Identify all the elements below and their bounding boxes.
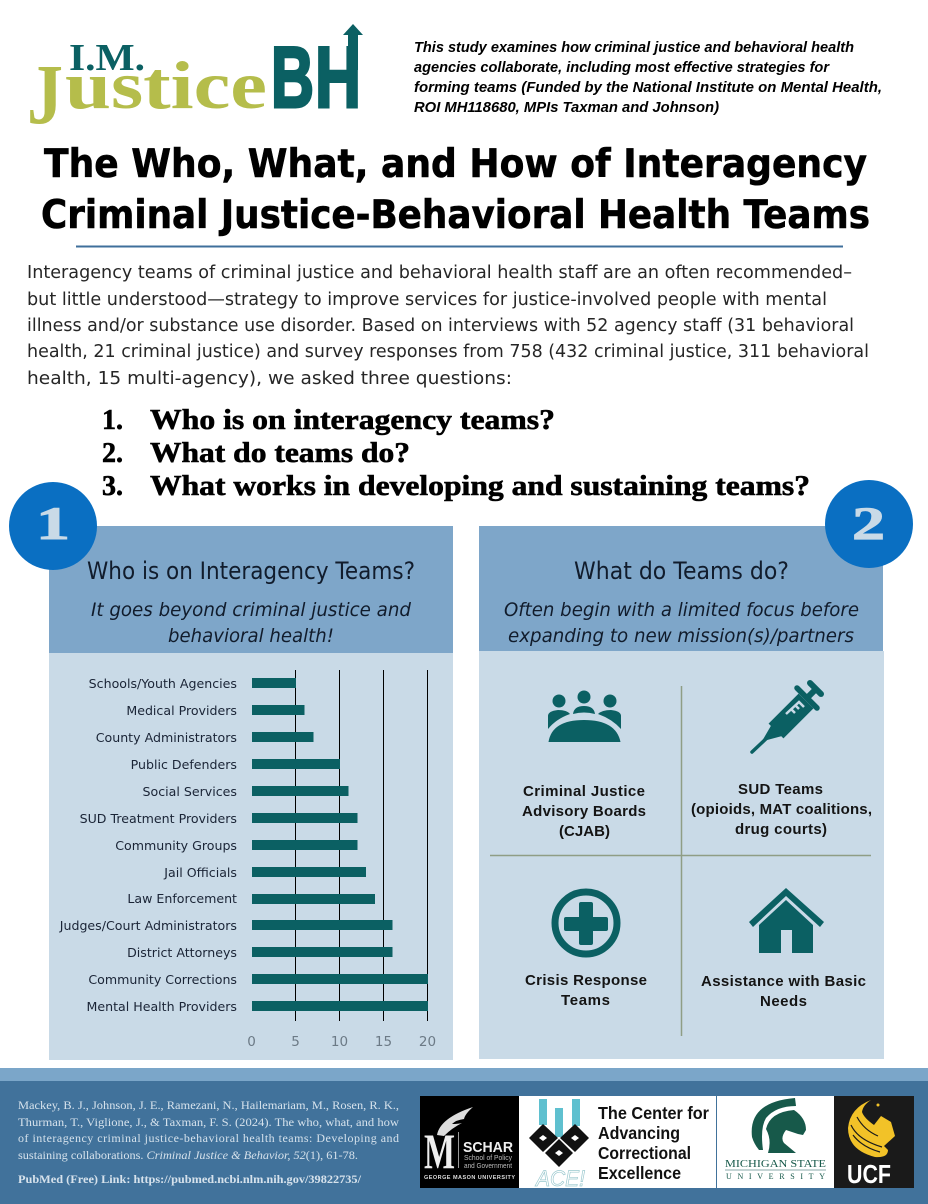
panel 1 subheading: It goes beyond criminal justice and (91, 599, 412, 621)
icon: people around table (548, 690, 621, 742)
badge 1: 1 (36, 498, 70, 550)
logo: I.M. JusticeBH: J (27, 46, 63, 142)
citation (18, 1098, 399, 1186)
bar chart: 0 (247, 1034, 256, 1050)
label: basic needs: Needs (760, 993, 807, 1010)
logo: I.M. JusticeBH: B (271, 30, 314, 126)
bar chart: Community Groups (115, 838, 237, 853)
logo: UCF (834, 1096, 914, 1189)
bar chart: 5 (291, 1034, 300, 1050)
bar chart: Judges/Court Administrators (59, 918, 237, 933)
logo: Schar School: GEORGE MASON UNIVERSITY (424, 1175, 515, 1181)
label: CJAB: (CJAB) (559, 823, 610, 840)
label: CJAB: Advisory Boards (522, 803, 646, 820)
logo: ACE: Advancing (598, 1123, 680, 1143)
bar chart: 10 (331, 1034, 348, 1050)
intro paragraph: illness and/or substance use disorder. Based on interviews with 52 agency staff (31 behavioral (27, 315, 854, 336)
badge 2: 2 (852, 498, 885, 550)
label: CJAB: Criminal Justice (523, 783, 645, 800)
study description (414, 40, 882, 116)
panel 2 heading: What do Teams do? (574, 557, 789, 585)
logo: I.M. JusticeBH: H (315, 30, 361, 126)
three questions (102, 405, 810, 502)
three questions: What do teams do? (150, 438, 410, 469)
label: SUD teams (691, 781, 872, 838)
bar chart: SUD Treatment Providers (80, 811, 237, 826)
bar chart: 20 (419, 1034, 436, 1050)
three questions: 3. (102, 471, 123, 502)
logo: I.M. JusticeBH: ustice (65, 47, 267, 123)
logo: Michigan State (716, 1096, 834, 1188)
panel 1: who is on teams (49, 526, 453, 1060)
icon: medical cross (555, 892, 617, 954)
bar chart: Medical Providers (126, 703, 237, 718)
logo: UCF: UCF (847, 1159, 891, 1189)
title: The Who, What, and How of Interagency (44, 142, 867, 187)
logo: ACE: ACE! (534, 1166, 585, 1191)
citation: Mackey, B. J., Johnson, J. E., Ramezani, N., Hailemariam, M., Rosen, R. K., (18, 1098, 399, 1112)
label: basic needs: Assistance with Basic (701, 973, 866, 990)
label: SUD teams: (opioids, MAT coalitions, (691, 801, 872, 818)
logo: Schar School: SCHAR (463, 1139, 513, 1156)
logo: Schar School: M (424, 1123, 455, 1179)
panel 1 subheading (91, 599, 412, 647)
bar chart: 15 (375, 1034, 392, 1050)
citation: of interagency criminal justice-behavioral health teams: Developing and (18, 1131, 399, 1145)
icon: house (749, 888, 824, 953)
panel 2 subheading: expanding to new mission(s)/partners (508, 625, 854, 647)
logo: ACE (519, 1096, 716, 1191)
bar chart: Schools/Youth Agencies (89, 676, 237, 691)
logo: ACE: Excellence (598, 1163, 681, 1183)
bar chart: Mental Health Providers (86, 999, 237, 1014)
label: SUD teams: drug courts) (735, 821, 827, 838)
label: crisis response: Crisis Response (525, 972, 647, 989)
bar chart: County Administrators (96, 730, 237, 745)
logo: Schar School: and Government (464, 1163, 512, 1170)
logo: I.M. JusticeBH (27, 24, 363, 142)
label: crisis response: Teams (561, 992, 610, 1009)
three questions: 1. (102, 405, 123, 436)
label: basic needs (701, 973, 866, 1010)
intro paragraph: health, 15 multi-agency), we asked three questions: (27, 368, 512, 389)
study description: forming teams (Funded by the National Institute on Mental Health, (414, 80, 882, 96)
label: CJAB (522, 783, 646, 840)
intro paragraph: Interagency teams of criminal justice and behavioral health staff are an often recommended– (27, 262, 852, 283)
bar chart: Law Enforcement (127, 891, 237, 906)
logo: Schar School: School of Policy (464, 1155, 512, 1162)
citation: Thurman, T., Viglione, J., & Taxman, F. S. (2024). The who, what, and how (18, 1115, 399, 1129)
citation: sustaining collaborations. Criminal Justice & Behavior, 52 (1), 61-78. (18, 1148, 358, 1162)
study description: This study examines how criminal justice and behavioral health (414, 40, 854, 56)
three questions: What works in developing and sustaining teams? (150, 471, 810, 502)
badge 1 (9, 482, 97, 570)
logo: Michigan State: MICHIGAN STATE (725, 1158, 826, 1170)
label: SUD teams: SUD Teams (738, 781, 823, 798)
panel 2: what do teams do (479, 526, 884, 1059)
icon: syringe (752, 683, 821, 752)
badge 2 (825, 480, 913, 568)
citation: PubMed (Free) Link: https://pubmed.ncbi.nlm.nih.gov/39822735/ (18, 1172, 362, 1186)
study description: agencies collaborate, including most effective strategies for (414, 60, 830, 76)
title (41, 142, 870, 238)
logo: Schar School (420, 1096, 519, 1188)
logo: I.M. JusticeBH: I.M. (69, 37, 145, 79)
intro paragraph: health, 21 criminal justice) and survey responses from 758 (432 criminal justice, 311 behavioral (27, 341, 869, 362)
bar chart (59, 670, 436, 1050)
bar chart: District Attorneys (127, 945, 237, 960)
logo: ACE: The Center for (598, 1103, 709, 1123)
three questions: 2. (102, 438, 123, 469)
logo: ACE: Correctional (598, 1143, 691, 1163)
bar chart: Jail Officials (163, 865, 237, 880)
footer band (0, 1068, 928, 1204)
bar chart: Social Services (143, 784, 237, 799)
intro paragraph: but little understood—strategy to improve services for justice-involved people with mental (27, 289, 827, 310)
panel 1 heading: Who is on Interagency Teams? (87, 557, 415, 585)
label: crisis response (525, 972, 647, 1009)
panel 1 subheading: behavioral health! (168, 625, 334, 647)
intro paragraph (27, 262, 869, 389)
logo: Michigan State: UNIVERSITY (726, 1172, 825, 1181)
bar chart: Public Defenders (131, 757, 237, 772)
panel 2 subheading (504, 599, 859, 647)
three questions: Who is on interagency teams? (150, 405, 555, 436)
study description: ROI MH118680, MPIs Taxman and Johnson) (414, 100, 719, 116)
bar chart: Community Corrections (88, 972, 237, 987)
title: Criminal Justice-Behavioral Health Teams (41, 193, 870, 238)
panel 2 subheading: Often begin with a limited focus before (504, 599, 859, 621)
